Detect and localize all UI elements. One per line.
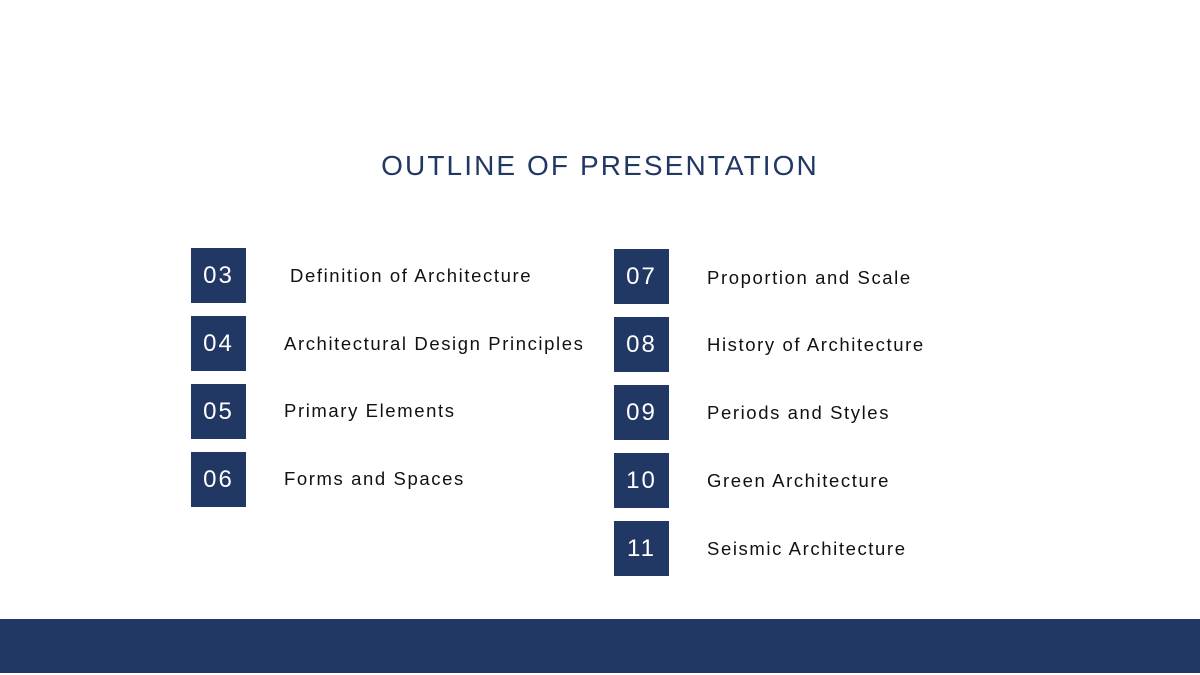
item 06 box bbox=[191, 452, 246, 507]
item 07 label: Proportion and Scale bbox=[707, 267, 912, 288]
item 07 box bbox=[614, 249, 669, 304]
item 09 box: 09 bbox=[626, 399, 657, 426]
item 11 box bbox=[614, 521, 669, 576]
item 05 box bbox=[191, 384, 246, 439]
item 09 box bbox=[614, 385, 669, 440]
item 06 label: Forms and Spaces bbox=[284, 468, 465, 489]
title: OUTLINE OF PRESENTATION bbox=[381, 150, 819, 181]
item 08 label: History of Architecture bbox=[707, 334, 925, 355]
item 09 label: Periods and Styles bbox=[707, 402, 890, 423]
item 11 label: Seismic Architecture bbox=[707, 538, 907, 559]
item 08 box bbox=[614, 317, 669, 372]
item 03 box: 03 bbox=[203, 262, 234, 289]
item 05 box: 05 bbox=[203, 398, 234, 425]
item 05 label: Primary Elements bbox=[284, 400, 456, 421]
item 10 label: Green Architecture bbox=[707, 470, 890, 491]
item 06 box: 06 bbox=[203, 466, 234, 493]
item 07 box: 07 bbox=[626, 263, 657, 290]
item 11 box: 11 bbox=[627, 535, 656, 562]
item 04 box bbox=[191, 316, 246, 371]
item 03 label: Definition of Architecture bbox=[290, 265, 532, 286]
item 04 label: Architectural Design Principles bbox=[284, 333, 584, 354]
item 10 box bbox=[614, 453, 669, 508]
item 03 box bbox=[191, 248, 246, 303]
item 10 box: 10 bbox=[626, 467, 657, 494]
item 04 box: 04 bbox=[203, 330, 234, 357]
footer bar bbox=[0, 619, 1200, 673]
item 08 box: 08 bbox=[626, 331, 657, 358]
